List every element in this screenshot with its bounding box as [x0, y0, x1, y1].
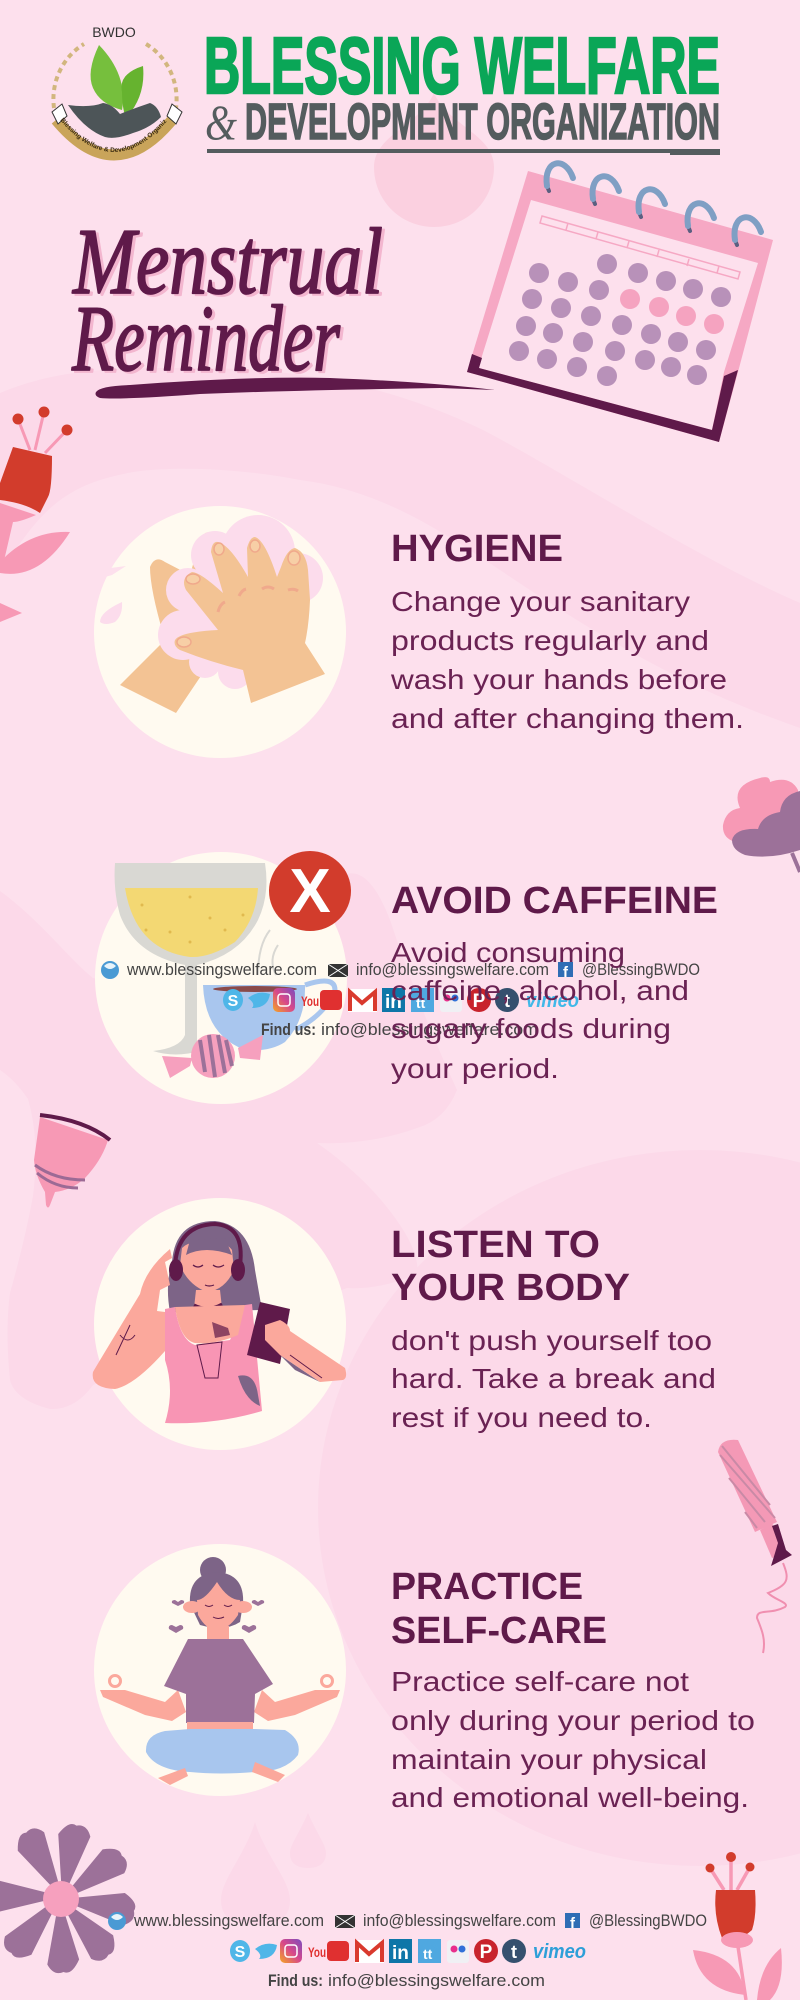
logo	[51, 24, 183, 160]
contact footer overlay (middle): www.blessingswelfare.com	[126, 960, 317, 979]
section: avoid caffeine: Avoid consuming	[391, 937, 625, 968]
contact footer (bottom): Find us:	[268, 1971, 323, 1990]
contact footer (bottom): @BlessingBWDO	[589, 1911, 707, 1930]
decorative drop	[374, 93, 494, 227]
header: organization name: &	[205, 94, 237, 150]
contact footer overlay (middle): Find us:	[261, 1020, 316, 1039]
contact footer overlay (middle): vimeo	[526, 990, 579, 1012]
section: practice self-care: only during your period to	[391, 1705, 755, 1736]
icon: red X badge: X	[289, 857, 331, 926]
contact footer (bottom): vimeo	[533, 1941, 586, 1963]
decoration: red flower left	[0, 406, 72, 622]
contact footer overlay (middle): in	[385, 992, 402, 1013]
section: listen to your body: LISTEN TO	[391, 1224, 600, 1266]
contact footer overlay (middle): t	[504, 991, 510, 1011]
contact footer (bottom): P	[480, 1942, 493, 1963]
icon circle: hand washing	[94, 506, 346, 758]
header: organization name	[204, 21, 720, 155]
section: listen to your body: hard. Take a break and	[391, 1363, 716, 1394]
section: hygiene: Change your sanitary	[391, 586, 690, 617]
section: listen to your body	[391, 1224, 716, 1433]
section: avoid caffeine	[391, 880, 718, 1084]
contact footer (bottom): info@blessingswelfare.com	[363, 1911, 556, 1930]
title: Menstrual	[74, 212, 386, 316]
contact footer overlay (middle)	[101, 960, 700, 1039]
section: hygiene	[390, 528, 744, 734]
decoration: menstrual cup	[34, 1115, 110, 1208]
section: practice self-care: and emotional well-being.	[391, 1782, 749, 1813]
section: listen to your body: YOUR BODY	[391, 1267, 630, 1309]
section: avoid caffeine: AVOID CAFFEINE	[391, 880, 718, 922]
logo: BWDO	[92, 24, 136, 40]
decoration: pink and purple flower right	[723, 777, 800, 872]
contact footer overlay (middle): tt	[416, 995, 426, 1011]
icon circle: woman with headphones	[93, 1198, 346, 1450]
calendar	[467, 163, 773, 442]
contact footer (bottom): f	[570, 1915, 576, 1932]
decoration: tampon	[718, 1440, 792, 1653]
section: practice self-care: PRACTICE	[391, 1566, 583, 1608]
section: listen to your body: rest if you need to.	[391, 1402, 652, 1433]
title: Menstrual	[71, 210, 383, 314]
icon: red X badge	[269, 851, 351, 931]
contact footer overlay (middle): @BlessingBWDO	[582, 960, 700, 979]
decoration: purple flower	[0, 1821, 138, 1974]
contact footer (bottom)	[108, 1911, 707, 1990]
section: practice self-care: maintain your physical	[391, 1744, 707, 1775]
contact footer (bottom): S	[235, 1944, 246, 1961]
brush underline	[96, 378, 495, 398]
section: avoid caffeine: sugary foods during	[391, 1013, 671, 1044]
contact footer (bottom): info@blessingswelfare.com	[328, 1971, 545, 1990]
section: practice self-care: SELF-CARE	[391, 1610, 607, 1652]
contact footer (bottom): tt	[423, 1946, 433, 1962]
contact footer (bottom): in	[392, 1943, 409, 1964]
section: listen to your body: don't push yourself too	[391, 1325, 712, 1356]
contact footer overlay (middle): f	[563, 964, 569, 981]
icon circle: no caffeine	[95, 852, 347, 1104]
section: avoid caffeine: caffeine, alcohol, and	[391, 975, 689, 1006]
contact footer (bottom): www.blessingswelfare.com	[133, 1911, 324, 1930]
section: hygiene: and after changing them.	[391, 703, 744, 734]
title	[71, 210, 386, 393]
section: avoid caffeine: your period.	[391, 1053, 559, 1084]
contact footer overlay (middle): S	[228, 993, 239, 1010]
decoration: red flower bottom right	[693, 1852, 782, 2000]
contact footer (bottom): You	[308, 1944, 326, 1960]
section: hygiene: HYGIENE	[391, 528, 563, 570]
contact footer overlay (middle): You	[301, 993, 319, 1009]
section: practice self-care	[391, 1566, 755, 1813]
contact footer overlay (middle): P	[473, 991, 486, 1012]
decorative drops bottom	[221, 1813, 326, 1925]
section: hygiene: products regularly and	[391, 625, 709, 656]
icon circle: meditating woman	[94, 1544, 346, 1796]
title: Reminder	[74, 289, 343, 393]
contact footer overlay (middle): info@blessingswelfare.com	[356, 960, 549, 979]
contact footer overlay (middle): info@blessingswelfare.com	[321, 1020, 538, 1039]
title: Reminder	[71, 287, 340, 391]
section: hygiene: wash your hands before	[390, 664, 727, 695]
section: practice self-care: Practice self-care not	[391, 1666, 689, 1697]
contact footer (bottom): t	[511, 1942, 517, 1962]
